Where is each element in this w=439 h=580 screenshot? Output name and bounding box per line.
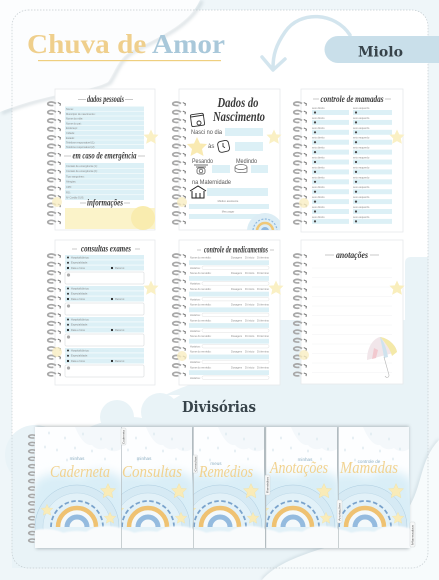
tab: Anotações: Anotações: [338, 502, 342, 521]
feeding rows: seio direito: [312, 116, 325, 120]
card: minhas Caderneta: [21, 427, 131, 569]
notebook: controle de mamadas: [294, 89, 404, 232]
card: meus Remédios: Remédios: [198, 462, 253, 481]
tab: Consultas: Consultas: [193, 456, 197, 472]
medication row 4: [189, 303, 270, 317]
icon: star at edge: [268, 280, 284, 295]
medication row 5: Dosagem: [231, 318, 242, 322]
icon: maternity building: [190, 186, 206, 198]
notebook: controle de medicamentos: [173, 240, 284, 385]
tab: Mamadas: [410, 522, 415, 547]
medication row 4: Dosagem: [231, 303, 242, 307]
card: minhas Consultas: Consultas: [122, 462, 182, 481]
heading: controle de medicamentos: [197, 244, 274, 254]
corner rainbow: [247, 213, 280, 230]
heading: dados do nascimento: [212, 95, 265, 124]
medication row 6: Nome do remédio:: [190, 334, 212, 338]
icon: star at edge: [144, 280, 158, 295]
information box with sun: [65, 206, 155, 230]
medication row 8: Nome do remédio:: [190, 365, 212, 369]
medication row 7: Dt início: [245, 350, 255, 354]
medication row 4: Dt início: [245, 303, 255, 307]
feeding rows: seio esquerdo: [353, 146, 370, 150]
personal data rows: Estado:: [66, 136, 75, 140]
card: minhas Consultas: minhas: [137, 456, 152, 461]
card: meus Remédios: meus: [210, 461, 222, 466]
appointment block 4: Data e hora:: [71, 359, 86, 363]
appointment block 2: Especialidade:: [71, 292, 88, 296]
notebook: dados pessoais: [48, 89, 158, 230]
appointment block 1: Data e hora:: [71, 266, 86, 270]
medication row 7: Dt término: [257, 350, 270, 354]
card: minhas Anotações: [237, 427, 347, 569]
spiral binding: [48, 102, 60, 224]
medication row 1: Dt início: [245, 256, 255, 260]
medication row 6: Dosagem: [231, 334, 242, 338]
personal data rows: Nome:: [66, 107, 74, 111]
medication row 6: Dt término: [257, 334, 270, 338]
feeding rows: seio direito: [312, 215, 325, 219]
feeding rows: seio esquerdo: [353, 156, 370, 160]
appointment block 4: [65, 348, 144, 377]
weight field: [192, 159, 230, 173]
medication row 7: [189, 350, 270, 364]
doctor field: Médico assistente: [218, 199, 239, 203]
medication row 3: Horários:: [190, 297, 201, 301]
heading: em caso de emergência: em caso de emergência: [72, 150, 137, 160]
icon: clock: [217, 140, 230, 153]
medication row 2: Dt início: [245, 271, 255, 275]
medication row 8: Dt término: [257, 365, 270, 369]
heading: informações: informações: [87, 198, 123, 208]
weight field: Pesando: [192, 159, 214, 165]
feeding rows: seio direito: [312, 185, 325, 189]
emergency rows: Contato de emergência (2):: [66, 169, 98, 173]
heading: anotações: anotações: [336, 250, 368, 260]
medication row 6: Dt início: [245, 334, 255, 338]
birth date field: [191, 128, 263, 136]
decoration: star behind spiral: [177, 197, 187, 207]
medication row 8: Dt início: [245, 365, 255, 369]
medication row 1: Dt término: [257, 256, 270, 260]
card: minhas Consultas: [92, 427, 202, 569]
feeding rows: seio direito: [312, 165, 325, 169]
emergency rows: Contato de emergência (1):: [66, 164, 98, 168]
medication row 1: Horários:: [190, 266, 201, 270]
heading: dados pessoais: dados pessoais: [87, 94, 124, 104]
feeding rows: seio esquerdo: [353, 185, 370, 189]
spiral binding: [29, 435, 41, 542]
maternity field: na Maternidade: [192, 180, 232, 186]
feeding rows: seio esquerdo: [353, 136, 370, 140]
card: minhas Anotações: minhas: [298, 457, 313, 462]
spiral binding: [48, 254, 60, 376]
appointment block 3: [65, 317, 144, 346]
personal data rows: Telefone responsável (1):: [66, 141, 95, 145]
feeding rows: seio esquerdo: [353, 175, 370, 179]
feeding rows: seio esquerdo: [353, 126, 370, 130]
personal data rows: Município de nascimento:: [66, 112, 96, 116]
card: controle de Mamadas: Mamadas: [339, 458, 398, 477]
medication row 3: Nome do remédio:: [190, 287, 212, 291]
tab: Anotações: [337, 500, 342, 523]
personal data rows: [65, 106, 144, 149]
appointment block 4: Retorno:: [115, 359, 125, 363]
divider cards: [21, 426, 419, 569]
medication row 1: Nome do remédio:: [190, 256, 212, 260]
heading: consultas e exames: consultas exames: [81, 244, 131, 254]
medication row 3: Dt término: [257, 287, 270, 291]
appointment block 2: Retorno:: [115, 297, 125, 301]
medication row 3: Dt início: [245, 287, 255, 291]
medication row 5: [189, 318, 270, 333]
medication row 5: Dt término: [257, 318, 270, 322]
tab: Consultas: [193, 455, 198, 473]
notebook: consultas e exames: [48, 240, 158, 385]
heading: controle de medicamentos: controle de medicamentos: [204, 244, 268, 254]
appointment block 3: Data e hora:: [71, 328, 86, 332]
heading: dados do nascimento: Dados do: [217, 95, 259, 110]
maternity field: [192, 180, 268, 196]
medication row 2: Dt término: [257, 271, 270, 275]
emergency rows: Nº Cartão SUS:: [66, 196, 84, 200]
spiral binding: [294, 254, 306, 376]
medication row 5: Horários:: [190, 329, 201, 333]
tab: Caderneta: Caderneta: [122, 429, 126, 444]
icon: star: [187, 137, 207, 156]
appointment block 3: Especialidade:: [71, 323, 88, 327]
tab: Remédios: [265, 475, 270, 495]
appointment block 4: Hospital/clínica:: [71, 348, 89, 352]
background swoosh bottom: [262, 440, 439, 580]
medication row 8: Dosagem: [231, 365, 242, 369]
medication row 7: Horários:: [190, 360, 201, 364]
medication row 6: [189, 334, 270, 348]
emergency rows: Alergias:: [66, 180, 76, 184]
medication row 1: [189, 256, 270, 270]
feeding rows: seio esquerdo: [353, 165, 370, 169]
medication row 1: Dosagem: [231, 256, 242, 260]
appointment block 4: Especialidade:: [71, 354, 88, 358]
appointment block 3: Hospital/clínica:: [71, 317, 89, 321]
appointment block 2: Data e hora:: [71, 297, 86, 301]
feeding rows: seio direito: [312, 146, 325, 150]
card: controle de Mamadas: controle de: [358, 459, 381, 464]
personal data rows: Telefone responsável (2):: [66, 145, 95, 149]
emergency rows: Tipo sanguíneo:: [66, 174, 85, 178]
card: meus Remédios: [164, 427, 274, 569]
tab: Caderneta: [121, 428, 126, 445]
spiral binding: [173, 254, 185, 376]
appointment block 1: [65, 255, 144, 284]
notebook: anotações: [294, 240, 404, 384]
appointment block 1: Retorno:: [115, 266, 125, 270]
medication row 5: Dt início: [245, 318, 255, 322]
feeding rows: seio direito: [312, 136, 325, 140]
icon: star at edge: [390, 130, 404, 144]
medication row 4: Dt término: [257, 303, 270, 307]
heading: anotações: [325, 250, 379, 260]
feeding rows: seio direito: [312, 205, 325, 209]
medication row 2: Dosagem: [231, 271, 242, 275]
icon: star at edge: [266, 130, 282, 144]
feeding rows: seio esquerdo: [353, 205, 370, 209]
card: minhas Caderneta: minhas: [70, 456, 85, 461]
personal data rows: Nome do pai:: [66, 121, 82, 125]
icon: measuring tape: [235, 164, 247, 173]
section tab: Miolo: Miolo: [358, 44, 403, 60]
feeding rows: seio direito: [312, 106, 325, 110]
appointment block 1: Hospital/clínica:: [71, 255, 89, 259]
spiral binding: [173, 102, 185, 224]
nurse field: Meu pagar: [222, 210, 234, 214]
emergency rows: RG:: [66, 190, 71, 194]
feeding rows: seio direito: [312, 175, 325, 179]
card: minhas Caderneta: Caderneta: [50, 462, 110, 481]
icon: star at edge: [390, 280, 404, 295]
icon: star: [144, 130, 158, 144]
feeding rows: seio direito: [312, 126, 325, 130]
appointment block 1: Especialidade:: [71, 261, 88, 265]
feeding rows: seio esquerdo: [353, 106, 370, 110]
decoration: star behind spiral: [299, 350, 309, 360]
feeding rows: seio esquerdo: [353, 195, 370, 199]
length field: Medindo: [236, 159, 258, 165]
notebook: dados do nascimento: [172, 88, 282, 230]
decoration: star behind spiral: [177, 351, 187, 361]
background swoosh top: [0, 0, 202, 113]
medication row 6: Horários:: [190, 344, 201, 348]
feeding rows: [312, 106, 392, 224]
card: controle de Mamadas: [309, 427, 419, 569]
personal data rows: Cidade:: [66, 131, 75, 135]
appointment block 2: Hospital/clínica:: [71, 286, 89, 290]
feeding rows: seio direito: [312, 195, 325, 199]
personal data rows: Nome da mãe:: [66, 117, 83, 121]
medication row 2: Horários:: [190, 282, 201, 286]
birth date field: Nasci no dia: [191, 130, 223, 136]
medication row 8: Horários:: [190, 376, 201, 380]
icon: calendar: [190, 113, 205, 127]
medication row 7: Dosagem: [231, 350, 242, 354]
tab: Remédios: Remédios: [266, 476, 270, 493]
title: Chuva de Amor: [27, 29, 225, 59]
birth time field: às: [208, 144, 214, 150]
feeding rows: seio esquerdo: [353, 215, 370, 219]
spiral binding: [294, 102, 306, 224]
medication row 7: Nome do remédio:: [190, 350, 212, 354]
appointment block 2: [65, 286, 144, 315]
personal data rows: Endereço:: [66, 126, 78, 130]
emergency rows: CPF:: [66, 185, 72, 189]
medication row 3: [189, 287, 270, 301]
medication row 2: [189, 271, 270, 286]
birth time field: [208, 142, 263, 151]
tab: Mamadas: Mamadas: [410, 524, 414, 545]
decoration: star behind spiral: [299, 198, 309, 208]
medication row 4: Nome do remédio:: [190, 303, 212, 307]
doctor field: [189, 199, 269, 209]
heading: controle de mamadas: controle de mamadas: [320, 94, 384, 104]
heading: Divisórias: Divisórias: [182, 398, 256, 416]
emergency rows: [65, 163, 144, 200]
section tab: Miolo: [325, 36, 439, 63]
appointment block 3: Retorno:: [115, 328, 125, 332]
card: minhas Anotações: Anotações: [269, 458, 328, 477]
decoration: star behind spiral: [52, 347, 62, 357]
medication row 3: Dosagem: [231, 287, 242, 291]
length field: [236, 159, 268, 173]
feeding rows: seio direito: [312, 156, 325, 160]
medication row 8: [189, 365, 270, 380]
icon: scale: [194, 165, 208, 174]
medication row 5: Nome do remédio:: [190, 318, 212, 322]
nurse field: [189, 210, 269, 219]
arrow: [262, 17, 350, 70]
feeding rows: seio esquerdo: [353, 116, 370, 120]
icon: umbrella: [367, 337, 397, 377]
medication row 4: Horários:: [190, 313, 201, 317]
medication row 2: Nome do remédio:: [190, 271, 212, 275]
background clouds: [5, 257, 428, 557]
decoration: star behind spiral: [52, 197, 62, 207]
heading: dados do nascimento: Nascimento: [212, 109, 265, 124]
